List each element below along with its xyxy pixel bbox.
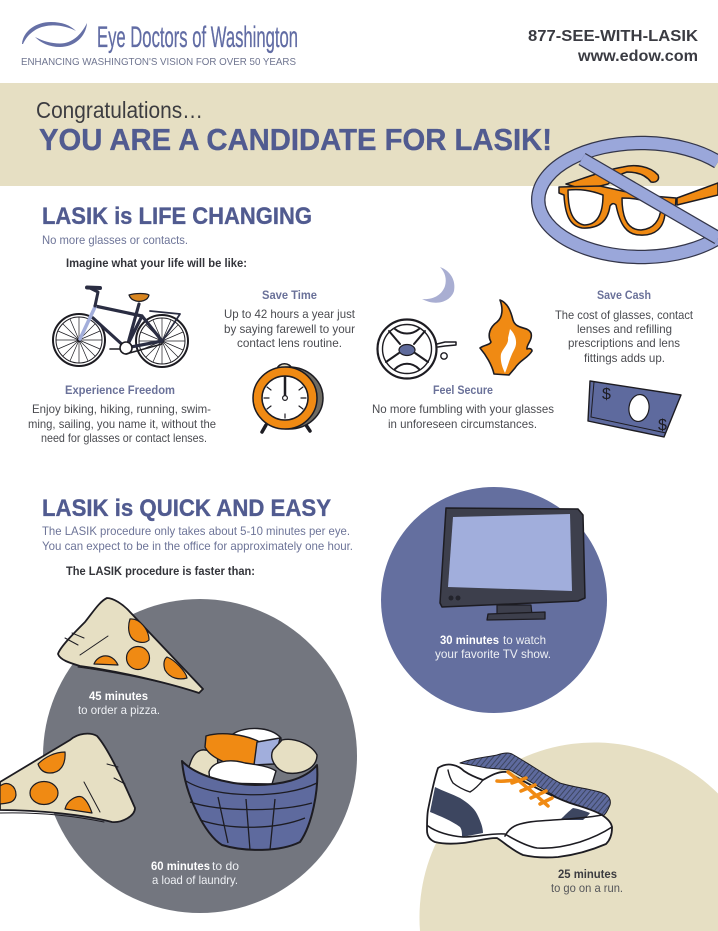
title banner (0, 83, 718, 186)
shoe toe accent (560, 808, 590, 820)
icon: laundry basket (182, 728, 317, 850)
caption: 60 minutes: a load of laundry. (152, 873, 238, 887)
caption: 25 minutes: to go on a run. (551, 881, 623, 895)
caption: 45 minutes: to order a pizza. (78, 703, 160, 717)
icon: stack of money: $ (658, 417, 667, 434)
logo eye mark (22, 22, 87, 47)
experience freedom heading: Experience Freedom (65, 383, 175, 397)
icon: crossed out glasses (538, 143, 718, 257)
block: feel secure (372, 383, 554, 431)
panel: beige circle (419, 742, 718, 931)
far temple arm (566, 166, 659, 190)
glasses front (559, 186, 676, 235)
block: experience freedom (28, 383, 216, 445)
save cash text: prescriptions and lens (568, 336, 680, 350)
logo wordmark: Eye Doctors of Washington (97, 21, 298, 54)
logo (21, 21, 298, 68)
caption: 60 minutes (151, 859, 239, 887)
rear wheel (53, 314, 105, 366)
save cash text: lenses and refilling (577, 322, 672, 336)
feel secure text: No more fumbling with your glasses (372, 402, 554, 416)
prohibition ring (538, 143, 718, 257)
icon: pizza slice top (58, 598, 203, 693)
block: save time (224, 288, 356, 350)
section heading: life changing: LASIK is LIFE CHANGING (42, 203, 312, 230)
icon: television (440, 508, 585, 620)
congratulations line: Congratulations… (36, 97, 203, 123)
icon: stack of money (588, 381, 681, 437)
section intro: No more glasses or contacts. (42, 233, 188, 247)
main headline: YOU ARE A CANDIDATE FOR LASIK! (39, 122, 552, 157)
caption: 25 minutes (551, 867, 623, 895)
save time text: contact lens routine. (237, 336, 342, 350)
caption: 30 minutes: 30 minutes (440, 633, 499, 647)
caption: 45 minutes (78, 689, 160, 717)
faster than lead-in: The LASIK procedure is faster than: (66, 564, 255, 578)
caption: 45 minutes: 45 minutes (89, 689, 148, 703)
feel secure text: in unforeseen circumstances. (388, 417, 537, 431)
save time text (224, 307, 356, 350)
save cash text (555, 308, 694, 365)
basket (182, 761, 317, 850)
handlebar (90, 288, 98, 306)
save cash text: fittings adds up. (584, 351, 665, 365)
caption: 25 minutes: 25 minutes (558, 867, 617, 881)
chainring (120, 342, 132, 354)
shoe upper (427, 764, 612, 857)
experience freedom text: Enjoy biking, hiking, running, swim- (32, 402, 211, 416)
icon: bicycle (53, 288, 188, 367)
caption: 30 minutes (435, 633, 551, 661)
save time heading: Save Time (262, 288, 317, 302)
rear rack (150, 311, 180, 340)
front wheel (136, 315, 188, 367)
shoe side panel (430, 787, 483, 837)
shoe tongue (460, 753, 610, 816)
icon: alarm clock (253, 364, 323, 432)
icon: pizza slice bottom (0, 734, 135, 822)
panel: tv show circle (381, 487, 607, 713)
phone number: 877-SEE-WITH-LASIK (528, 28, 698, 45)
imagine lead-in: Imagine what your life will be like: (66, 256, 247, 270)
section intro: procedure time (42, 524, 353, 553)
panel: gray circle (43, 599, 357, 913)
logo tagline: ENHANCING WASHINGTON'S VISION FOR OVER 50 YEARS (21, 56, 296, 68)
block: save cash (555, 288, 694, 365)
section heading: quick and easy: LASIK is QUICK AND EASY (42, 495, 331, 522)
save time text: by saying farewell to your (224, 322, 355, 336)
icon: steering wheel (378, 320, 456, 378)
shoe collar (448, 770, 483, 792)
save cash text: The cost of glasses, contact (555, 308, 694, 322)
icon: flame (480, 300, 532, 375)
feel secure text (372, 402, 554, 431)
title (36, 97, 552, 157)
frame (93, 304, 162, 348)
shoe laces (497, 772, 552, 806)
caption: 60 minutes: to do (212, 859, 239, 873)
icon: running shoe (427, 753, 612, 857)
website: www.edow.com (577, 48, 698, 65)
fork (80, 307, 95, 339)
feel secure heading: Feel Secure (433, 383, 493, 397)
shoe sole line (428, 815, 612, 848)
save time text: Up to 42 hours a year just (224, 307, 356, 321)
caption: 30 minutes: to watch (503, 633, 546, 647)
section intro: procedure time: You can expect to be in the office for approximately one hour. (42, 539, 353, 553)
experience freedom text: ming, sailing, you name it, without the (28, 417, 216, 431)
saddle (129, 294, 149, 301)
near temple arm (677, 183, 718, 205)
clothes (187, 728, 317, 784)
experience freedom text (28, 402, 216, 445)
contact details (528, 28, 698, 65)
experience freedom text: need for glasses or contact lenses. (41, 431, 207, 445)
section intro: procedure time: The LASIK procedure only takes about 5-10 minutes per eye. (42, 524, 350, 538)
icon: stack of money: $ (602, 386, 611, 403)
save cash heading: Save Cash (597, 288, 651, 302)
caption: 30 minutes: your favorite TV show. (435, 647, 551, 661)
caption: 60 minutes: 60 minutes (151, 859, 210, 873)
icon: moon (422, 267, 454, 303)
